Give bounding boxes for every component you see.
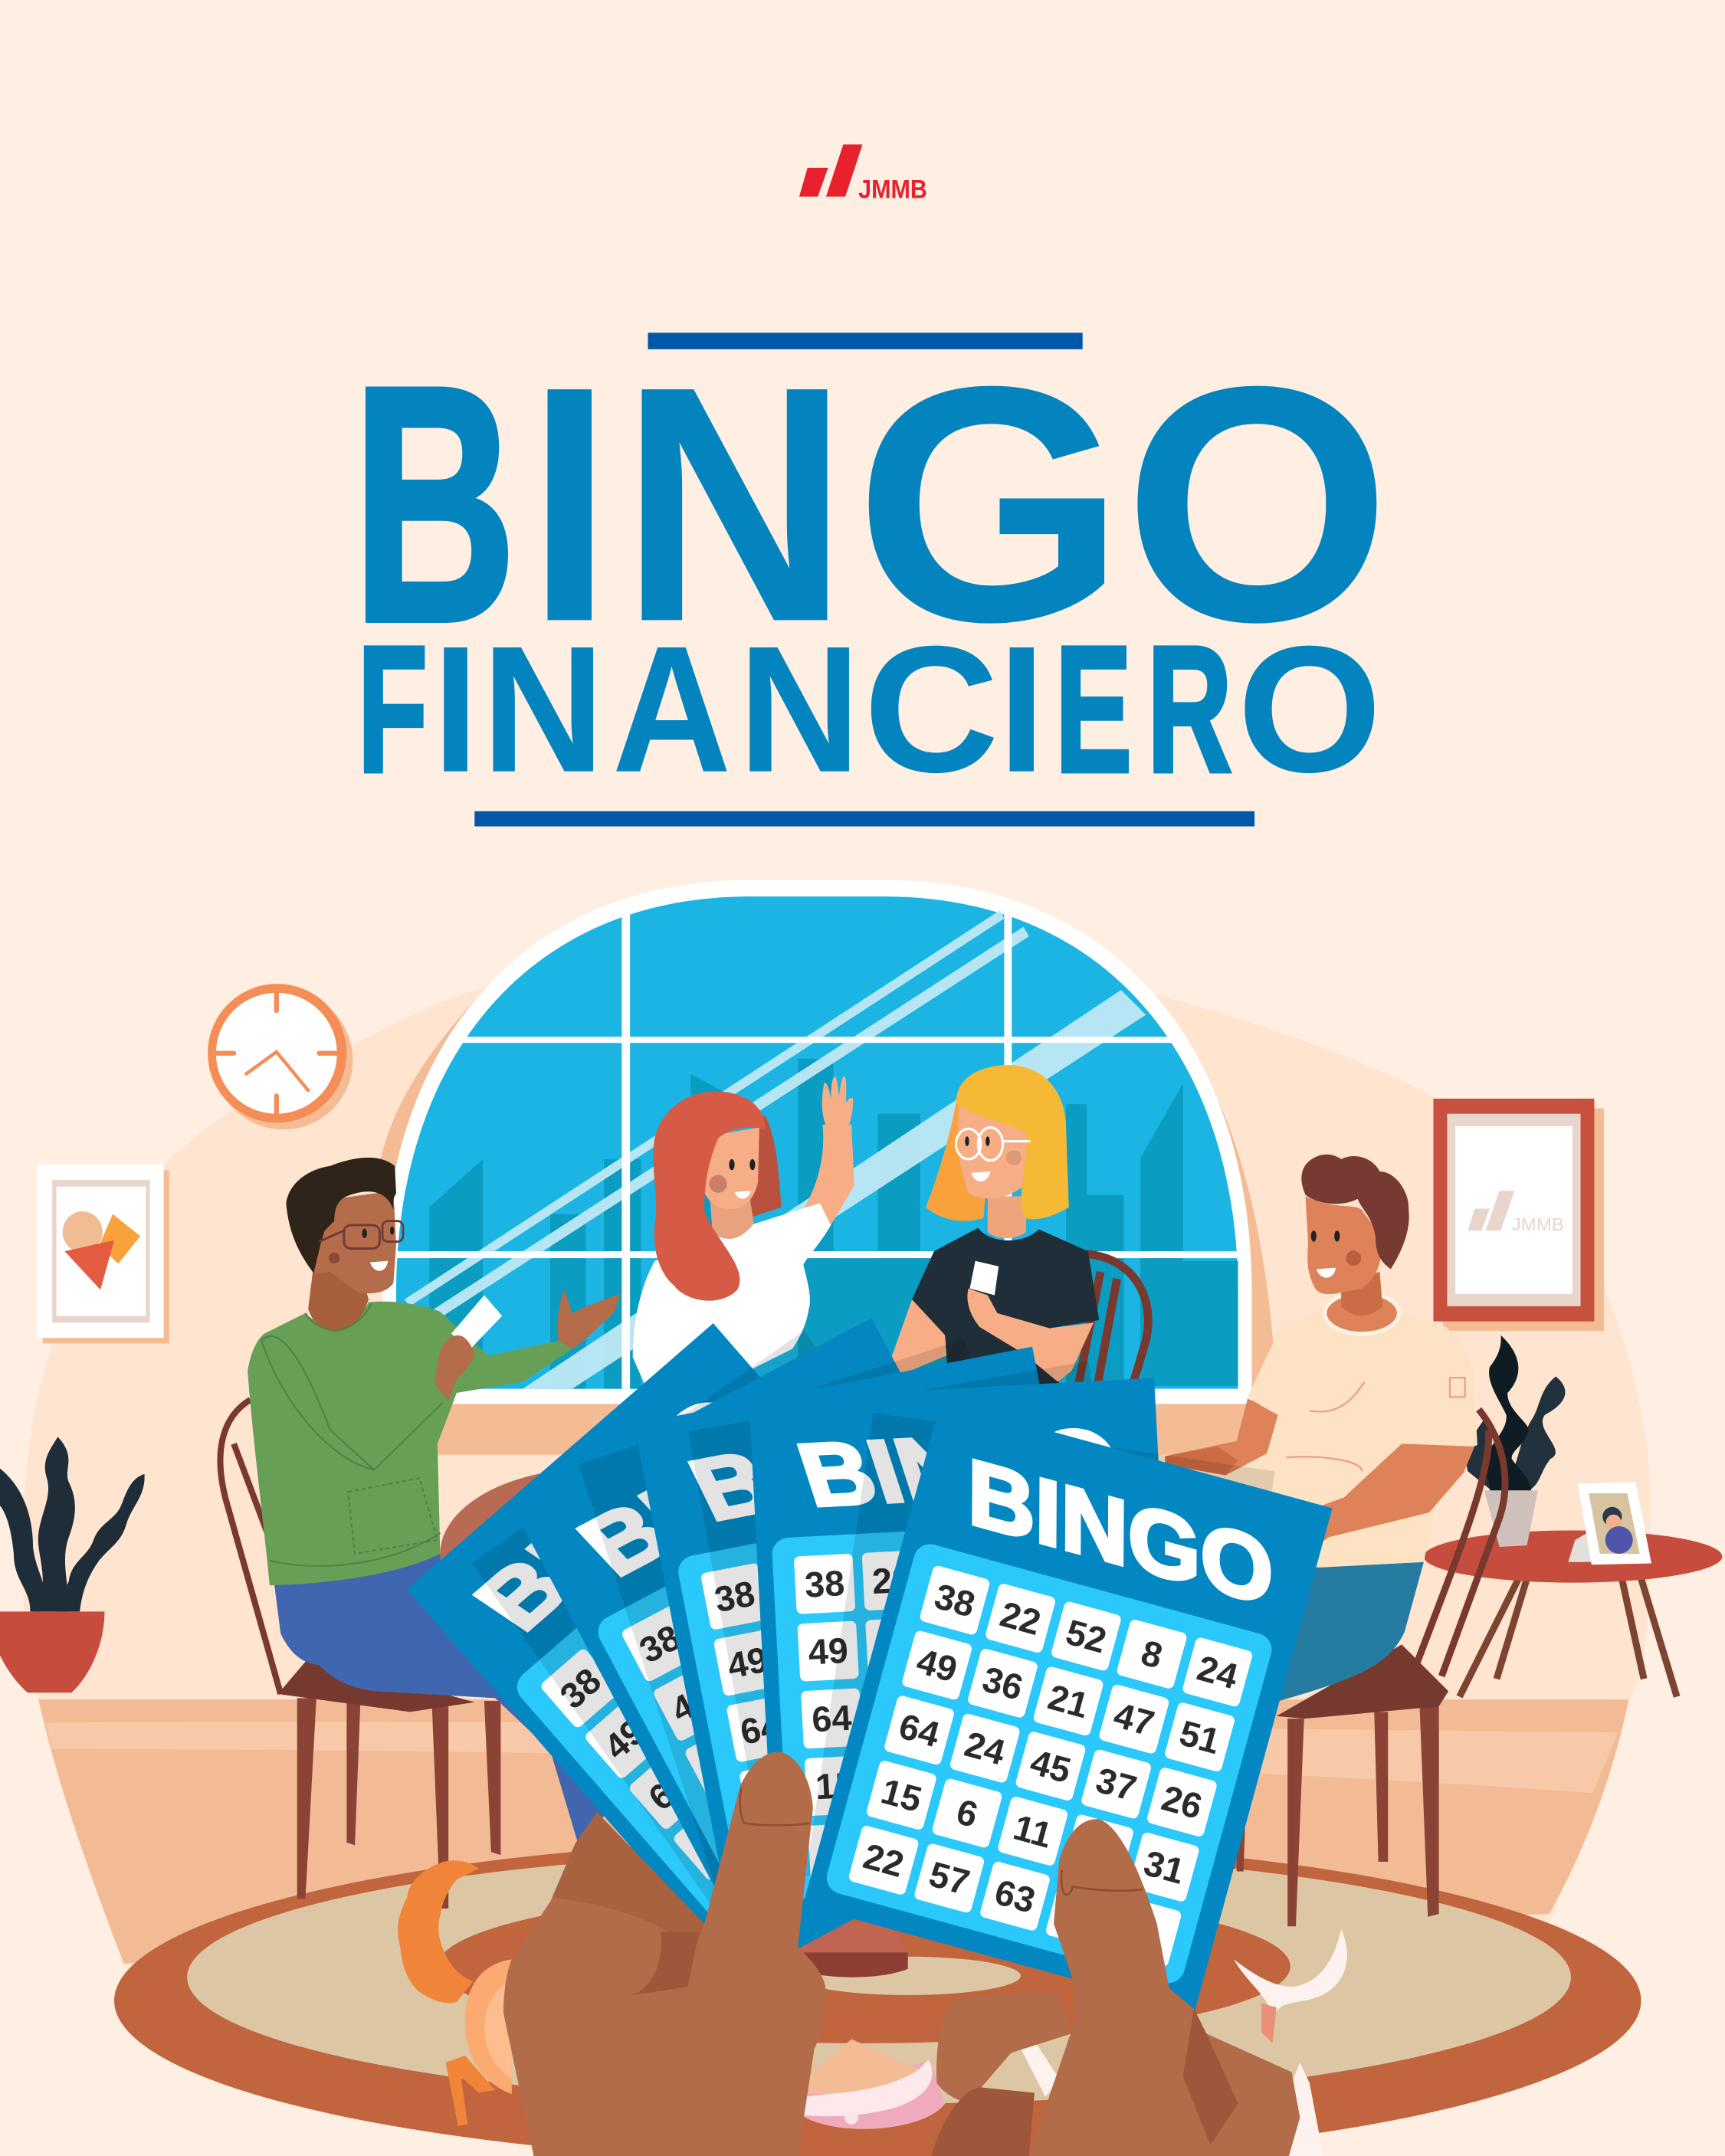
bingo card 4: [686, 1358, 1182, 1925]
bingo card 5: front: 8: [1137, 1633, 1166, 1676]
plant: left: [0, 1437, 145, 1692]
title: BINGO FINANCIERO: A: [612, 608, 731, 810]
bingo card 5: front: 36: [979, 1659, 1027, 1708]
hand: right fingers: [931, 1992, 1071, 2156]
title: BINGO FINANCIERO: C: [864, 608, 999, 810]
bingo card 5: front: 57: [925, 1854, 974, 1902]
bingo card 4: 49: [807, 1630, 849, 1673]
bingo card 1: 15: [685, 1813, 741, 1869]
bingo card 4: 38: [804, 1563, 845, 1605]
title: BINGO FINANCIERO: R: [1147, 608, 1232, 810]
bingo card 1: BINGO: [454, 1381, 779, 1646]
title: BINGO FINANCIERO: N: [621, 316, 848, 691]
picture: left wall frame: [37, 1165, 169, 1343]
bingo card 5: front: 26: [1158, 1778, 1206, 1827]
bingo card 3: 15: [750, 1771, 796, 1818]
bingo card 3: 64: [737, 1705, 784, 1752]
bingo card 5: front: 15: [877, 1771, 926, 1820]
bingo card 3: 22: [762, 1838, 809, 1885]
bingo card 5: front: 6: [953, 1791, 982, 1835]
bingo card 3: [569, 1327, 1132, 1949]
bingo card 2: [448, 1300, 1117, 1999]
bingo card 5: front: 38: [930, 1576, 979, 1625]
bingo card 4: 22: [871, 1559, 913, 1601]
bingo card 4: BINGO: [787, 1411, 1135, 1525]
center table: [440, 1469, 908, 1977]
window: [379, 880, 1277, 1455]
bingo card 5: front: 37: [1092, 1760, 1141, 1809]
cat: [398, 1860, 512, 2126]
bingo card 2: BINGO: [559, 1369, 909, 1593]
bingo card 5: front: 11: [1009, 1807, 1056, 1856]
bingo card 5: front: [743, 1365, 1338, 2012]
person: red-haired woman: [633, 1076, 854, 1389]
dog: [1018, 1929, 1347, 2156]
wall background: [21, 959, 1651, 1966]
title: BINGO FINANCIERO: B: [353, 316, 517, 691]
title: BINGO FINANCIERO: E: [1055, 608, 1132, 810]
logo: JMMB: [799, 144, 927, 204]
bingo card 2: 15: [728, 1795, 782, 1850]
title: BINGO FINANCIERO: [353, 316, 1391, 827]
bingo card 4: 64: [811, 1698, 853, 1739]
hand: right with thumb: [1029, 1819, 1300, 2156]
bingo card 3: BINGO: [675, 1387, 1031, 1539]
logo: JMMB: JMMB: [858, 175, 927, 204]
title: BINGO FINANCIERO: N: [482, 608, 605, 810]
bingo card 1: 64: [641, 1762, 697, 1818]
bingo card 5: front: 47: [1110, 1695, 1159, 1744]
bingo card 2: 22: [759, 1855, 813, 1909]
side table with plant and photo: [1424, 1335, 1722, 1697]
title: BINGO FINANCIERO: F: [358, 608, 428, 810]
bingo card 1: 38: [553, 1660, 608, 1716]
title: BINGO FINANCIERO: G: [854, 316, 1126, 691]
bingo card 1: [407, 1323, 1056, 1984]
bingo card 5: front: 24: [960, 1724, 1009, 1773]
bingo card 3: 38: [711, 1573, 758, 1620]
bingo card 2: 49: [664, 1676, 719, 1730]
title: BINGO FINANCIERO: I: [433, 608, 478, 810]
person: man with green sweater: [248, 1158, 619, 1843]
person: man with cream shirt: [1165, 1155, 1505, 1701]
bingo card 4: 15: [815, 1765, 856, 1807]
bingo card 2: 64: [697, 1736, 750, 1790]
bingo card 5: front: 52: [1062, 1612, 1110, 1661]
bingo card 4: 22: [818, 1832, 860, 1874]
title: BINGO FINANCIERO: N: [739, 608, 861, 810]
clock: [208, 984, 353, 1129]
picture: right wall frame with logo: JMMB: [1512, 1214, 1564, 1234]
bingo card 5: front: 63: [991, 1872, 1039, 1921]
chair: left man: [220, 1400, 500, 1909]
rug: [114, 1838, 1641, 2156]
bingo card 5: front: 31: [1140, 1843, 1189, 1892]
bingo card 3: 49: [724, 1640, 771, 1686]
person: blonde woman: [890, 1065, 1099, 1391]
bingo card 5: front: 22: [996, 1594, 1045, 1643]
bingo card 5: front: 64: [895, 1705, 944, 1755]
bingo card 5: front: 45: [1026, 1742, 1075, 1791]
food bowl: [795, 2039, 945, 2129]
title: BINGO FINANCIERO: O: [1123, 316, 1391, 691]
bingo card 5: front: 51: [1176, 1712, 1225, 1761]
bingo card 5: front: BINGO: [968, 1440, 1273, 1626]
floor: [38, 1699, 1628, 1964]
bingo card 5: front: 49: [913, 1641, 962, 1690]
title: BINGO FINANCIERO: I: [527, 316, 612, 691]
title: BINGO FINANCIERO: I: [999, 608, 1045, 810]
bingo card 1: 49: [597, 1711, 653, 1768]
picture: right wall frame with logo: [1433, 1099, 1604, 1331]
bingo card 2: 38: [633, 1617, 687, 1671]
chair: right man: [1237, 1644, 1448, 1926]
bingo card 1: 22: [730, 1863, 785, 1920]
chair: behind blonde woman: [1077, 1254, 1148, 1391]
bingo card 5: front: 22: [859, 1836, 908, 1885]
hand: left with thumb: [503, 1751, 826, 2156]
title: BINGO FINANCIERO: O: [1237, 608, 1382, 810]
bingo card 5: front: 21: [1044, 1677, 1093, 1725]
bingo card 5: front: 24: [1193, 1648, 1242, 1696]
